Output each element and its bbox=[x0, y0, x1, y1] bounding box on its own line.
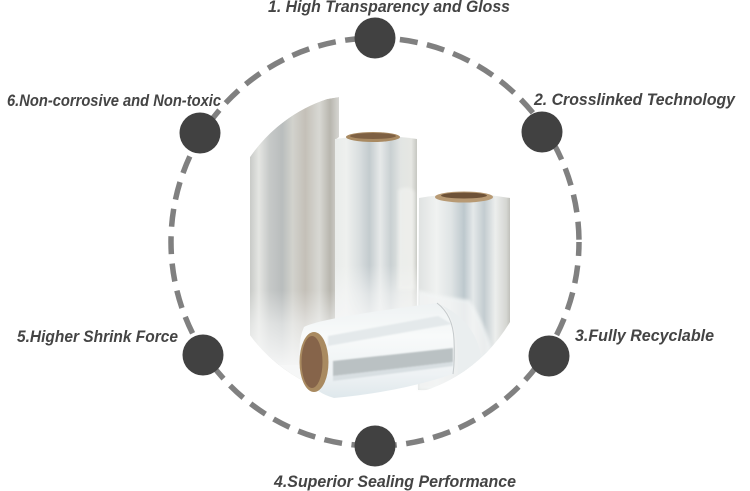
label 2: 2. Crosslinked Technology bbox=[533, 91, 736, 109]
tall film sheet bbox=[250, 97, 339, 380]
node 6 bbox=[180, 112, 220, 154]
background rolls bbox=[250, 97, 510, 390]
label 4: 4.Superior Sealing Performance bbox=[273, 473, 516, 491]
cardboard core bbox=[300, 332, 328, 392]
label 6: 6.Non-corrosive and Non-toxic bbox=[7, 92, 221, 110]
roll: front bbox=[300, 303, 454, 398]
node 5 bbox=[182, 334, 224, 376]
node 3 bbox=[528, 336, 570, 376]
node 2 bbox=[522, 112, 562, 152]
label 5: 5.Higher Shrink Force bbox=[17, 328, 178, 346]
reflection bands bbox=[328, 316, 453, 381]
film skirt behind front roll bbox=[437, 303, 482, 378]
node 1 bbox=[354, 18, 396, 58]
cardboard core bbox=[435, 192, 493, 202]
roll: back right bbox=[418, 192, 510, 390]
product photo: film rolls bbox=[240, 97, 510, 415]
cardboard core bbox=[346, 132, 400, 142]
roll: back centre bbox=[335, 132, 417, 330]
node 4 bbox=[354, 426, 396, 466]
label 3: 3.Fully Recyclable bbox=[575, 327, 714, 345]
dashed ring bbox=[171, 38, 579, 446]
